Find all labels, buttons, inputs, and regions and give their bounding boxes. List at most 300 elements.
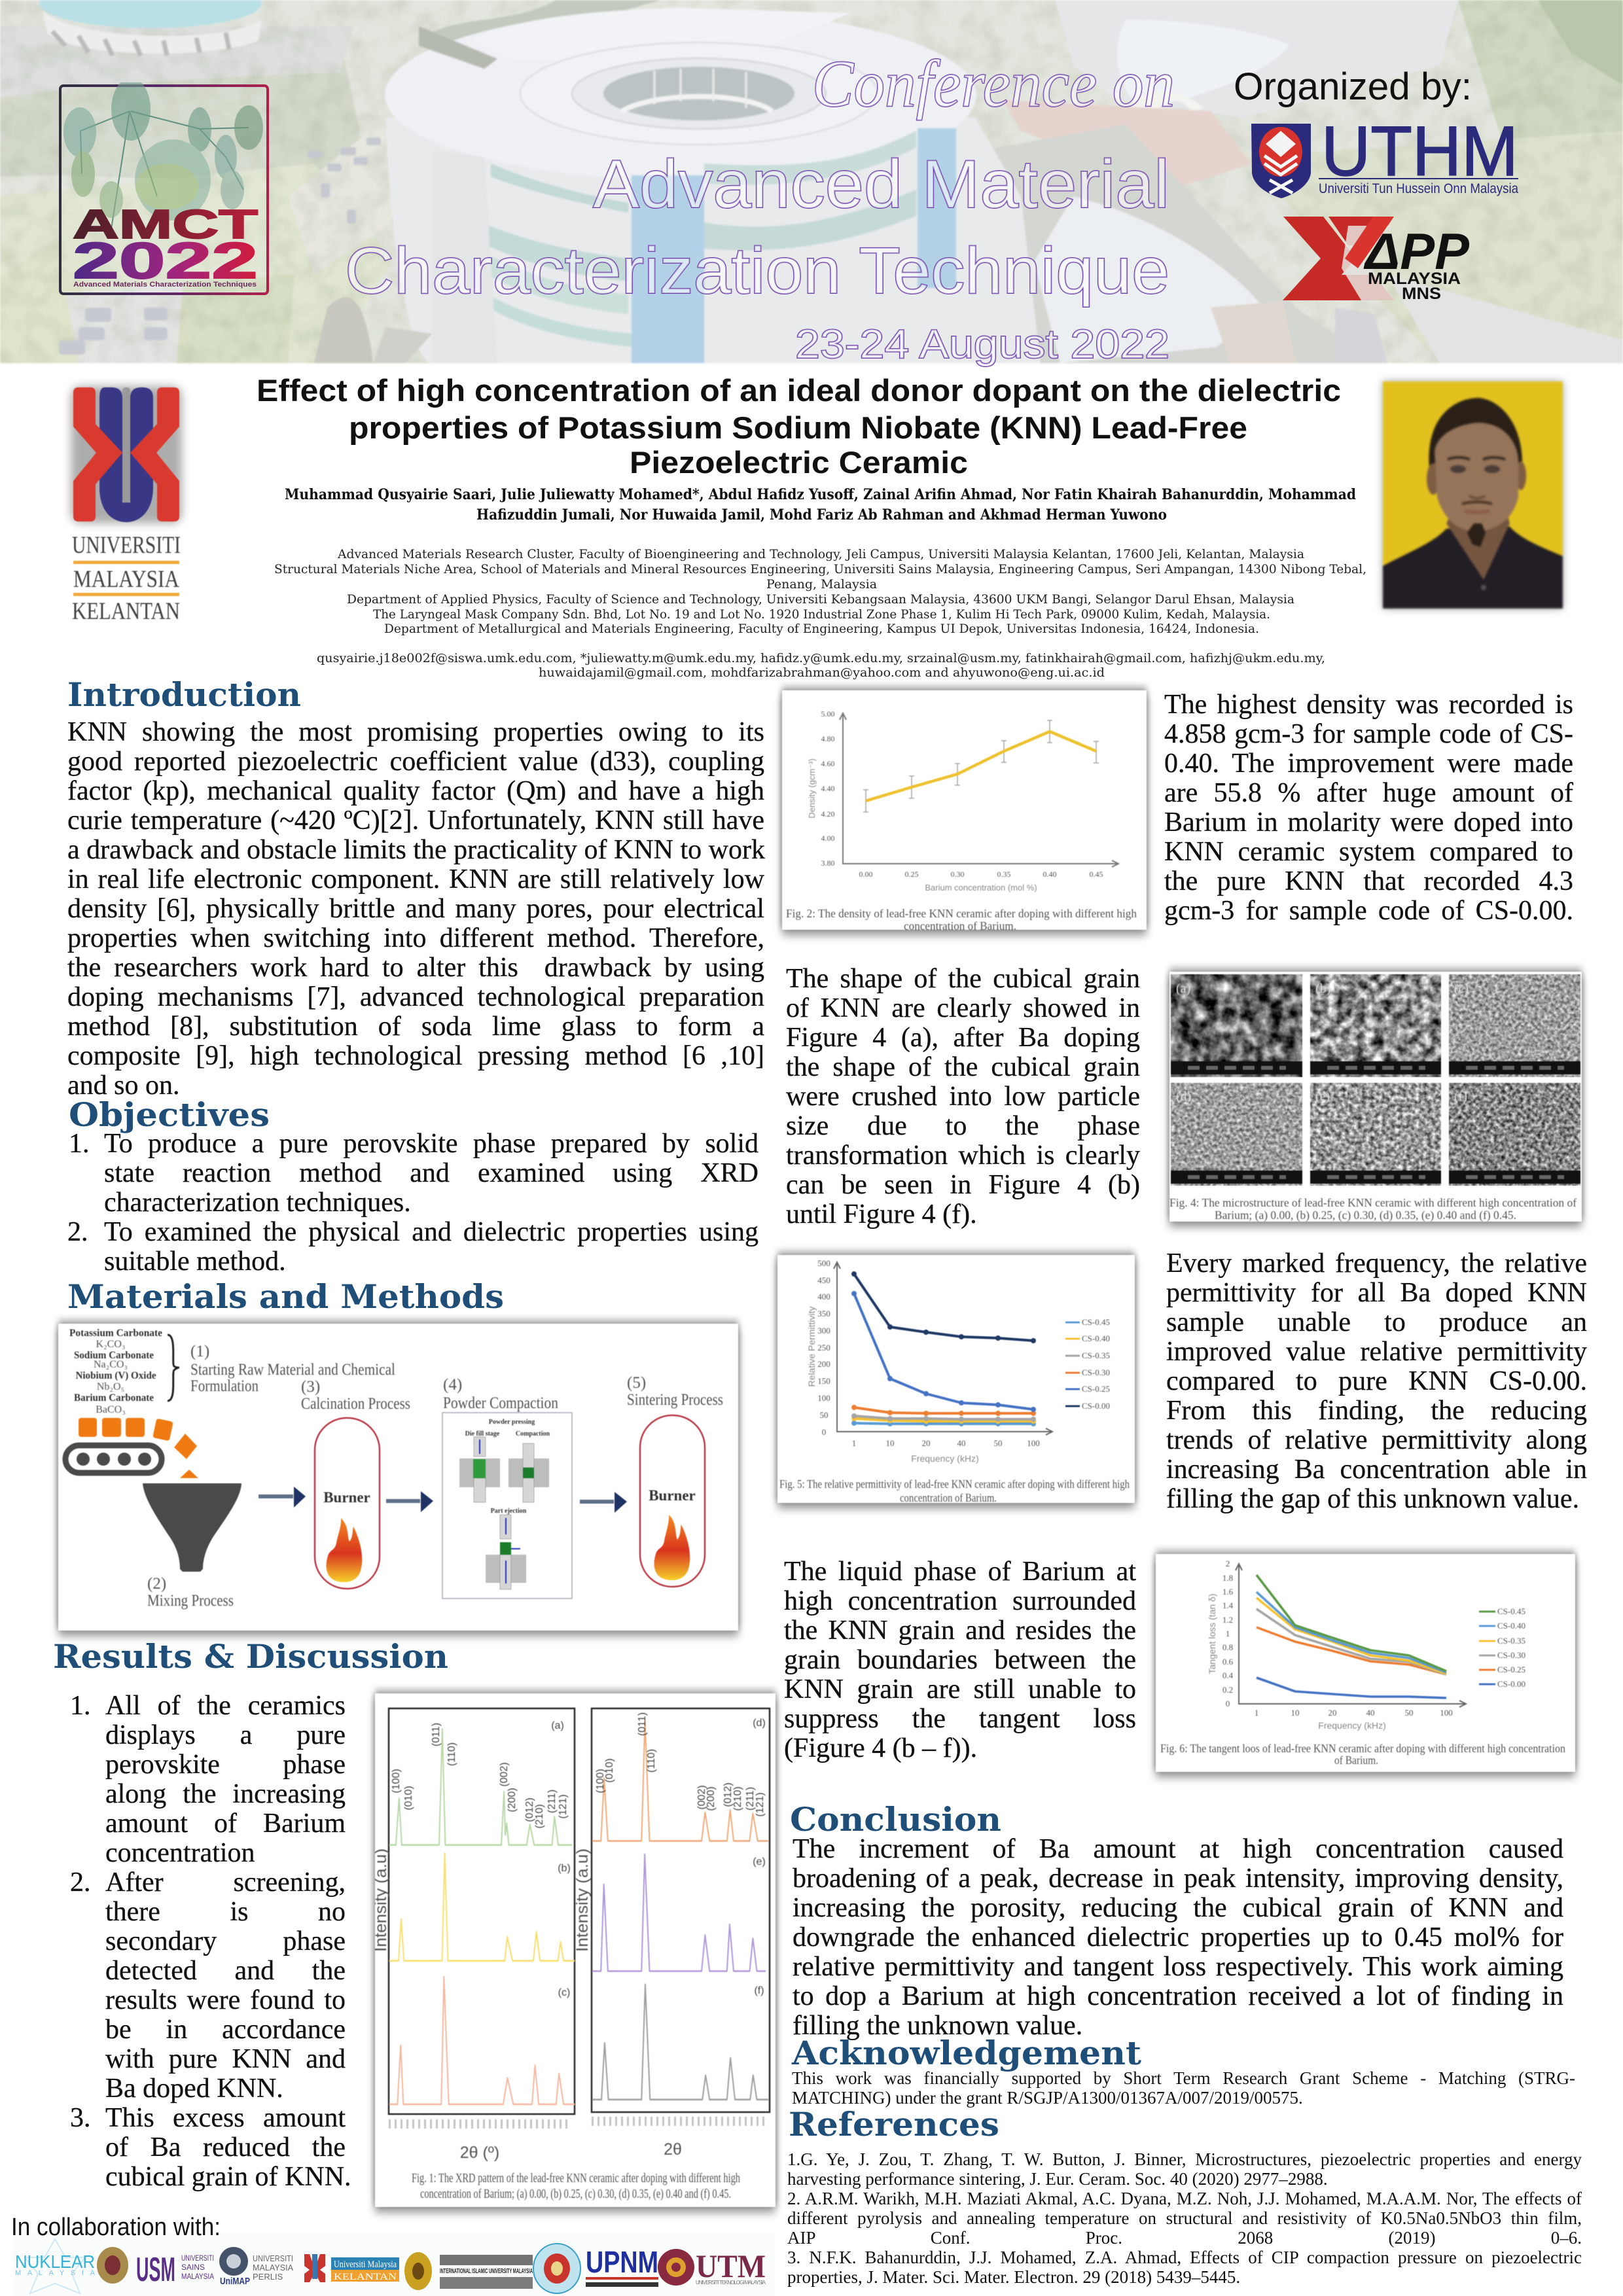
SEM image e: (e) [1315, 1089, 1330, 1104]
text: grain shape findings: size due to the phase [786, 1111, 1140, 1141]
raw materials list [69, 1328, 162, 1415]
SEM image d: (d) [1176, 1089, 1191, 1104]
title: properties of Potassium Sodium Niobate (KNN) Lead-Free [349, 410, 1247, 445]
affiliations and emails: Department of Applied Physics, Faculty of Science and Technology, Universiti Kebangsaan Malaysia, 43600 UKM Bangi, Selangor Darul Ehsan, Malaysia [347, 592, 1294, 607]
tick labels: 100 [1440, 1708, 1453, 1718]
text: permittivity findings [1166, 1249, 1587, 1514]
text: results list: 3. [70, 2103, 90, 2133]
text: objectives list: 2. [67, 1217, 88, 1247]
peak labels right: (010) [604, 1758, 615, 1783]
text: references: 1.G. Ye, J. Zou, T. Zhang, T. W. Button, J. Binner, Microstructures, piezoelectric properties and energy [787, 2149, 1582, 2169]
text: grain shape findings [786, 964, 1140, 1229]
tick labels: 10 [886, 1438, 894, 1448]
caption [1169, 1196, 1577, 1222]
peak labels right: (200) [705, 1786, 717, 1811]
affiliations and emails: Penang, Malaysia [766, 577, 877, 592]
panel: materials and methods flow diagram [58, 1324, 738, 1631]
text: grain shape findings: until Figure 4 (f). [786, 1199, 977, 1229]
heading: References: References [789, 2105, 999, 2144]
tick labels: 300 [817, 1326, 830, 1335]
tick rows [389, 2121, 766, 2124]
organized by label: Organized by: [1234, 65, 1472, 108]
text: permittivity findings: compared to pure KNN CS-0.00. [1166, 1366, 1587, 1396]
data series [854, 1274, 1033, 1424]
logo: UPNM: UPNM [586, 2245, 658, 2279]
text: acknowledgement: This work was financially supported by Short Term Research Grant Scheme - Matching (STRG- [792, 2068, 1575, 2088]
tick labels: 250 [817, 1343, 830, 1352]
peak labels right: (121) [755, 1792, 766, 1817]
text: references: AIP Conf. Proc. 2068 (2019) 0–6. [787, 2228, 1582, 2248]
caption [786, 907, 1137, 932]
legend [1479, 1606, 1525, 1689]
text: tangent loss findings: KNN grain are still unable to [784, 1674, 1136, 1704]
text: introduction: curie temperature (~420 ºC)[2]. Unfortunately, KNN still have [67, 805, 764, 836]
text: introduction: the researchers work hard to alter this drawback by using [67, 953, 764, 983]
text: tangent loss findings: suppress the tangent loss [784, 1704, 1136, 1734]
SEM image a: (a) [1176, 981, 1190, 996]
text: references [787, 2149, 1582, 2287]
tick labels: 400 [817, 1292, 830, 1301]
tick labels: 50 [1404, 1708, 1414, 1718]
tick labels: 1.4 [1222, 1600, 1234, 1610]
text: tangent loss findings: the KNN grain and resides the [784, 1616, 1136, 1646]
text: results list: This excess amount [105, 2103, 346, 2133]
affiliations and emails: qusyairie.j18e002f@siswa.umk.edu.com, *juliewatty.m@umk.edu.my, hafidz.y@umk.edu.my, srzainal@usm.my, fatinkhairah@gmail.com, hafizhj@ukm.edu.my, [317, 651, 1325, 665]
text: references: different pyrolysis and annealing temperature on structural and resistivity of K0.5Na0.5NbO3 thin film, [787, 2208, 1582, 2228]
peak labels left: (002) [499, 1762, 510, 1787]
conference title outlined text: Conference on [812, 47, 1175, 121]
peak labels right: (002) [696, 1785, 707, 1810]
text: references: harvesting performance sintering, J. Eur. Ceram. Soc. 40 (2020) 2977–2988. [787, 2169, 1328, 2189]
XRD traces [389, 1720, 768, 2104]
logo: UniMAP: UniMAP [220, 2276, 250, 2287]
tick labels: 40 [957, 1438, 966, 1448]
legend: CS-0.45 [1497, 1606, 1525, 1616]
logo: round emblem [533, 2244, 580, 2293]
text: results list: with pure KNN and [105, 2044, 346, 2074]
step labels: Calcination Process [301, 1395, 410, 1413]
peak labels right: (100) [595, 1769, 606, 1793]
text: density findings: Barium in molarity were doped into [1164, 807, 1573, 838]
text: objectives list [67, 1129, 758, 1277]
tick labels: 1 [1255, 1708, 1258, 1718]
peak labels right: (d) [753, 1718, 766, 1729]
raw materials list: K₂CO₃ [96, 1339, 125, 1350]
text: grain shape findings: Figure 4 (a), after Ba doping [786, 1023, 1140, 1053]
tick labels: 10 [1291, 1708, 1300, 1718]
peak labels right: (e) [753, 1856, 766, 1867]
text: density findings: 4.858 gcm-3 for sample code of CS- [1164, 719, 1573, 749]
panel: figure 4 SEM micrographs [1169, 972, 1582, 1222]
SEM image e [1310, 1083, 1441, 1186]
step labels: (5) [627, 1374, 646, 1392]
text: results list: displays a pure [105, 1720, 346, 1750]
text: conclusion: broadening of a peak, decrease in peak intensity, improving density, [793, 1863, 1563, 1894]
text: tangent loss findings: The liquid phase of Barium at [784, 1557, 1136, 1587]
logo: UTM [658, 2248, 766, 2286]
y ticks: 4.80 [821, 734, 835, 743]
legend: CS-0.25 [1082, 1384, 1110, 1394]
title [257, 373, 1341, 480]
y ticks [821, 709, 1103, 879]
affiliations and emails: Structural Materials Niche Area, School of Materials and Mineral Resources Engineering, Universiti Sains Malaysia, Engineering Campus, Seri Ampangan, 14300 Nibong Tebal, [274, 562, 1366, 576]
logo: USM: USM [136, 2251, 175, 2289]
peak labels left: (c) [558, 1987, 570, 1998]
text: introduction: and so on. [67, 1070, 179, 1101]
peak labels left: (012) [524, 1797, 535, 1822]
y ticks: 4.60 [821, 759, 835, 768]
tick labels: 450 [817, 1275, 830, 1285]
panel: figure 2 density chart: Barium concentration (mol %) [925, 883, 1037, 892]
text: results list: be in accordance [105, 2015, 346, 2045]
tick labels: 50 [819, 1410, 829, 1420]
text: introduction: doping mechanisms [7], advanced technological preparation [67, 982, 764, 1012]
SEM image d [1171, 1083, 1302, 1186]
logo: UniMAP [219, 2247, 293, 2287]
raw materials list: Na₂CO₃ [94, 1359, 128, 1370]
text: objectives list: 1. [69, 1129, 89, 1159]
tick labels: 50 [993, 1438, 1003, 1448]
legend: CS-0.35 [1497, 1636, 1525, 1646]
text: conclusion: increasing the porosity, reducing the cubical grain of KNN and [793, 1893, 1563, 1923]
text: results list: Ba doped KNN. [105, 2074, 283, 2104]
authors [285, 486, 1356, 523]
peak labels left: (a) [551, 1720, 564, 1731]
arrows [259, 1487, 627, 1513]
peak labels right: (210) [732, 1786, 743, 1811]
authors: Hafizuddin Jumali, Nor Huwaida Jamil, Mohd Fariz Ab Rahman and Akhmad Herman Yuwono [476, 506, 1167, 523]
SEM image b [1310, 974, 1441, 1077]
axis labels [372, 1848, 682, 2162]
caption: of Barium. [1334, 1754, 1378, 1767]
author photo [1383, 381, 1563, 609]
text: grain shape findings: of KNN are clearly showed in [786, 993, 1140, 1023]
tick labels: 500 [817, 1258, 830, 1268]
step labels: (3) [301, 1378, 320, 1396]
conference title outlined text [345, 47, 1175, 367]
tick labels: 0 [822, 1427, 826, 1437]
caption [1160, 1742, 1565, 1767]
heading: Acknowledgement: Acknowledgement [791, 2034, 1141, 2072]
text: objectives list: To examined the physical and dielectric properties using [104, 1217, 758, 1247]
logo: AMCT 2022: 2022 [73, 232, 258, 289]
y ticks: 0.45 [1089, 870, 1103, 879]
logo: UMK [304, 2254, 399, 2282]
logo: Nuklear Malaysia [15, 2239, 96, 2293]
peak labels right: (011) [637, 1712, 648, 1736]
conference title outlined text: Characterization Technique [345, 234, 1169, 308]
logo: International Islamic University Malaysia [440, 2255, 533, 2289]
step labels: Powder Compaction [443, 1394, 558, 1412]
tick labels: 1.2 [1222, 1615, 1233, 1625]
text: objectives list: To produce a pure perovskite phase prepared by solid [104, 1129, 758, 1159]
powder compaction schematic: Part ejection [491, 1508, 527, 1515]
SEM image f [1449, 1083, 1580, 1186]
peak labels left: (110) [446, 1742, 457, 1766]
panel: figure 6 tangent loss chart [1156, 1554, 1575, 1772]
logo: Sigma Delta APP Malaysia MNS: MNS [1402, 285, 1441, 303]
logo: gold crest [404, 2252, 432, 2290]
raw materials list: Sodium Carbonate [74, 1350, 154, 1361]
logo: UMK: Universiti Malaysia [334, 2259, 397, 2270]
tick labels: 0 [1226, 1699, 1230, 1708]
caption: Fig. 4: The microstructure of lead-free KNN ceramic with different high concentration of [1169, 1196, 1577, 1209]
burner: sintering: Burner [649, 1487, 696, 1504]
peak labels right: (110) [646, 1749, 657, 1773]
axis titles: Tangent loss (tan δ) [1207, 1594, 1217, 1674]
tick labels: 0.2 [1222, 1685, 1233, 1695]
text: density findings: KNN ceramic system compared to [1164, 837, 1573, 867]
text: permittivity findings: permittivity for all Ba doped KNN [1166, 1278, 1587, 1308]
raw materials list: BaCO₃ [96, 1404, 126, 1415]
text: results list: After screening, [105, 1867, 346, 1898]
step labels [147, 1343, 723, 1610]
text: introduction [67, 717, 766, 1101]
axis titles: Relative Permittivity [806, 1307, 817, 1386]
logo: Sigma Delta APP Malaysia MNS [1283, 217, 1470, 303]
text: conclusion: relative permittivity and tangent loss respectively. This work aiming [793, 1952, 1563, 1982]
panel: figure 6 tangent loss chart: Frequency (kHz) [1318, 1720, 1386, 1731]
legend: CS-0.45 [1082, 1317, 1110, 1327]
text: objectives list: characterization techniques. [104, 1188, 411, 1218]
text: grain shape findings: The shape of the cubical grain [786, 964, 1140, 994]
text: tangent loss findings: grain boundaries between the [784, 1645, 1136, 1675]
text: tangent loss findings: (Figure 4 (b – f)). [784, 1733, 977, 1763]
text: results list: there is no [105, 1897, 346, 1927]
text: introduction: properties when switching into different method. Therefore, [67, 923, 764, 953]
panel: figure 5 relative permittivity chart [777, 1255, 1135, 1503]
logo: USM: MALAYSIA [181, 2272, 214, 2281]
heading: Results and Discussion: Results & Discussion [53, 1637, 448, 1676]
powder compaction schematic [442, 1413, 572, 1598]
logo: UniMAP: UNIVERSITI [253, 2253, 293, 2263]
text: tangent loss findings [784, 1557, 1136, 1763]
text: introduction: method [8], substitution of soda lime glass to form a [67, 1012, 764, 1042]
caption: Barium; (a) 0.00, (b) 0.25, (c) 0.30, (d) 0.35, (e) 0.40 and (f) 0.45. [1215, 1209, 1516, 1222]
heading: Materials and Methods: Materials and Methods [67, 1277, 504, 1316]
logo: Nuklear Malaysia: MALAYSIA [15, 2269, 96, 2277]
text: conclusion: filling the unknown value. [793, 2011, 1082, 2041]
panel: figure 2 density chart [782, 690, 1147, 930]
text: results list: perovskite phase [105, 1750, 346, 1780]
text: permittivity findings: filling the gap of this unknown value. [1166, 1484, 1579, 1514]
logo: UMK: KELANTAN [334, 2272, 397, 2282]
text: introduction: a drawback and obstacle limits the practicality of KNN to work [67, 835, 765, 865]
step labels: (1) [190, 1343, 209, 1360]
text: results list: of Ba reduced the [105, 2132, 346, 2163]
burner: calcination: Burner [323, 1489, 370, 1506]
peak labels right: (211) [745, 1787, 756, 1810]
step labels: (2) [147, 1575, 166, 1593]
affiliations and emails: huwaidajamil@gmail.com, mohdfarizabrahman@yahoo.com and ahyuwono@eng.ui.ac.id [539, 665, 1105, 680]
tick labels: 1 [1226, 1629, 1230, 1638]
legend: CS-0.30 [1082, 1368, 1110, 1377]
tick labels: 1.8 [1222, 1573, 1233, 1583]
burner: sintering [640, 1415, 705, 1587]
tick labels: 200 [817, 1359, 830, 1369]
logo: Nuklear Malaysia: NUKLEAR [15, 2252, 95, 2272]
text: references: 3. N.F.K. Bahanurddin, J.J. Mohamed, Z.A. Ahmad, Effects of CIP compaction pressure on piezoelectric [787, 2248, 1582, 2267]
text: permittivity findings: sample unable to produce an [1166, 1307, 1587, 1337]
y ticks: 0.00 [859, 870, 873, 879]
data series [1257, 1575, 1446, 1698]
y ticks: 0.40 [1043, 870, 1056, 879]
header banner background photo [0, 0, 1623, 364]
tick labels [817, 1258, 1040, 1448]
tick labels: 150 [817, 1376, 830, 1386]
text: grain shape findings: can be seen in Figure 4 (b) [786, 1170, 1140, 1200]
logo mark [71, 386, 182, 523]
text: density findings: The highest density was recorded is [1164, 690, 1573, 720]
text: results list: concentration [105, 1838, 255, 1868]
text: results list [70, 1691, 346, 2192]
title: Effect of high concentration of an ideal donor dopant on the dielectric [257, 373, 1341, 408]
text: results list: 2. [70, 1867, 90, 1898]
text: permittivity findings: improved value relative permittivity [1166, 1337, 1587, 1367]
logo: UniMAP: PERLIS [253, 2272, 283, 2282]
conveyor with orange blocks [65, 1418, 198, 1478]
SEM image a [1171, 974, 1302, 1077]
heading: Objectives: Objectives [69, 1095, 270, 1134]
powder compaction schematic: Die fill stage [465, 1430, 500, 1438]
logo: USM: SAINS [181, 2263, 205, 2272]
text: density findings: the pure KNN that recorded 4.3 [1164, 866, 1573, 896]
caption [412, 2171, 740, 2201]
logo: UTHM [1251, 121, 1518, 198]
text: conclusion: to dop a Barium at high concentration received a lot of finding in [793, 1981, 1563, 2011]
raw materials list: Niobium (V) Oxide [76, 1370, 156, 1381]
tick labels: 2 [1226, 1559, 1230, 1568]
text: density findings: 0.40. The improvement were made [1164, 749, 1573, 779]
SEM image b: (b) [1315, 981, 1330, 996]
y ticks: 3.80 [821, 858, 835, 868]
text: results list: amount of Barium [105, 1809, 346, 1839]
affiliations and emails: Advanced Materials Research Cluster, Faculty of Bioengineering and Technology, Jeli Campus, Universiti Malaysia Kelantan, 17600 Jeli, Kelantan, Malaysia [337, 547, 1304, 561]
tick labels: 1.6 [1222, 1587, 1234, 1597]
heading: Conclusion: Conclusion [790, 1800, 1001, 1839]
y ticks: 0.35 [997, 870, 1010, 879]
text: results list: cubical grain of KNN. [105, 2162, 351, 2192]
text: conclusion: downgrade the enhanced dielectric properties up to 0.45 mol% for [793, 1922, 1563, 1952]
peak labels right: (f) [754, 1985, 764, 1996]
logo: AMCT 2022: Advanced Materials Characterization Techniques [73, 281, 257, 289]
y ticks: 0.25 [904, 870, 919, 879]
text: acknowledgement [792, 2068, 1575, 2108]
tick labels: 350 [817, 1309, 830, 1318]
affiliations and emails: Department of Metallurgical and Materials Engineering, Faculty of Engineering, Kampus UI Depok, Universitas Indonesia, 16424, Indonesia. [384, 622, 1259, 636]
y ticks: 4.20 [821, 809, 835, 819]
legend: CS-0.35 [1082, 1351, 1110, 1360]
tick labels: 20 [1329, 1708, 1336, 1718]
text: introduction: density [6], physically brittle and many pores, pour electrical [67, 894, 764, 924]
logo: USM: UNIVERSITI [181, 2253, 214, 2263]
brace [168, 1335, 179, 1401]
axis titles: Density (gcm⁻³) [807, 758, 817, 819]
error bars [863, 720, 1099, 812]
conference title outlined text: Advanced Material [593, 147, 1169, 222]
tick labels: 0.6 [1222, 1657, 1234, 1667]
axis labels: 2θ [664, 2140, 682, 2159]
powder compaction schematic: Compaction [516, 1430, 550, 1438]
text: introduction: composite [9], high technological pressing method [6 ,10] [67, 1041, 764, 1071]
y ticks: 4.40 [821, 784, 835, 793]
logo: Universiti Malaysia Kelantan [62, 376, 190, 624]
SEM image c [1449, 974, 1580, 1077]
text: conclusion: The increment of Ba amount at high concentration caused [793, 1834, 1563, 1864]
affiliations and emails [274, 547, 1366, 680]
text: results list: along the increasing [105, 1779, 346, 1809]
text: density findings: gcm-3 for sample code of CS-0.00. [1164, 896, 1573, 926]
logo: crest [97, 2247, 128, 2284]
raw materials list: Potassium Carbonate [69, 1328, 162, 1339]
tick labels [1222, 1559, 1453, 1718]
text: references: 2. A.R.M. Warikh, M.H. Maziati Akmal, A.C. Dyana, M.Z. Noh, J.J. Mohamed, M.A.A.M. Nor, The effects of [787, 2189, 1582, 2208]
peak labels left: (210) [534, 1804, 545, 1829]
axes [834, 1262, 1052, 1435]
logo: AMCT 2022 [59, 82, 269, 295]
logo: Sigma Delta APP Malaysia MNS: ΔPP [1363, 222, 1470, 280]
step labels: Sintering Process [627, 1391, 723, 1409]
peak labels left: (121) [558, 1794, 569, 1819]
peak labels left: (011) [431, 1723, 442, 1746]
raw materials list: Barium Carbonate [74, 1392, 154, 1404]
text: density findings [1164, 690, 1573, 926]
text: results list: secondary phase [105, 1926, 346, 1956]
text: grain shape findings: were crushed into low particle [786, 1082, 1140, 1112]
step labels: Mixing Process [147, 1592, 234, 1610]
y ticks: 0.30 [950, 870, 965, 879]
text: results list: 1. [70, 1691, 90, 1721]
logo: UniMAP: MALAYSIA [253, 2263, 293, 2272]
panel: figure 5 relative permittivity chart: Frequency (kHz) [911, 1453, 979, 1464]
peak labels left: (200) [507, 1788, 518, 1812]
affiliations and emails: The Laryngeal Mask Company Sdn. Bhd, Lot No. 19 and Lot No. 1920 Industrial Zone Phase 1, Kulim Hi Tech Park, 09000 Kulim, Kedah, Malaysia. [373, 607, 1270, 622]
XRD frames [389, 1708, 770, 2114]
step labels: (4) [443, 1376, 462, 1394]
tick labels: 1 [852, 1438, 856, 1448]
funnel [143, 1483, 241, 1572]
logo: Sigma Delta APP Malaysia MNS: MALAYSIA [1368, 270, 1461, 288]
legend: CS-0.25 [1497, 1665, 1525, 1674]
axis labels: Intensity (a.u) [573, 1848, 592, 1952]
y ticks: 4.00 [821, 834, 835, 843]
text: introduction: in real life electronic component. KNN are still relatively low [67, 864, 764, 894]
text: grain shape findings: the shape of the cubical grain [786, 1052, 1140, 1082]
SEM image c: (c) [1454, 981, 1469, 996]
axes [1236, 1564, 1466, 1707]
text: results list: results were found to [105, 1985, 346, 2015]
text: introduction: KNN showing the most promising properties owing to its [67, 717, 764, 747]
heading: Introduction: Introduction [67, 675, 301, 714]
burner: calcination [315, 1418, 380, 1589]
peak labels left: (010) [403, 1786, 414, 1810]
tick labels: 0.4 [1222, 1670, 1234, 1680]
peak labels left: (b) [558, 1863, 571, 1874]
collaborator logo strip [12, 2233, 775, 2296]
axes [840, 713, 1118, 867]
legend: CS-0.30 [1497, 1650, 1525, 1660]
powder compaction schematic: Powder pressing [489, 1419, 535, 1426]
legend: CS-0.00 [1497, 1679, 1525, 1689]
text: results list: detected and the [105, 1956, 346, 1986]
logo: UTM: UNIVERSITI TEKNOLOGI MALAYSIA [696, 2280, 766, 2286]
logo: UPNM [586, 2245, 658, 2287]
text: introduction: good reported piezoelectric coefficient value (d33), coupling [67, 747, 764, 777]
tick labels: 40 [1366, 1708, 1374, 1718]
legend [1065, 1317, 1110, 1411]
step labels: Formulation [190, 1377, 259, 1395]
text: grain shape findings: transformation which is clearly [786, 1140, 1140, 1171]
